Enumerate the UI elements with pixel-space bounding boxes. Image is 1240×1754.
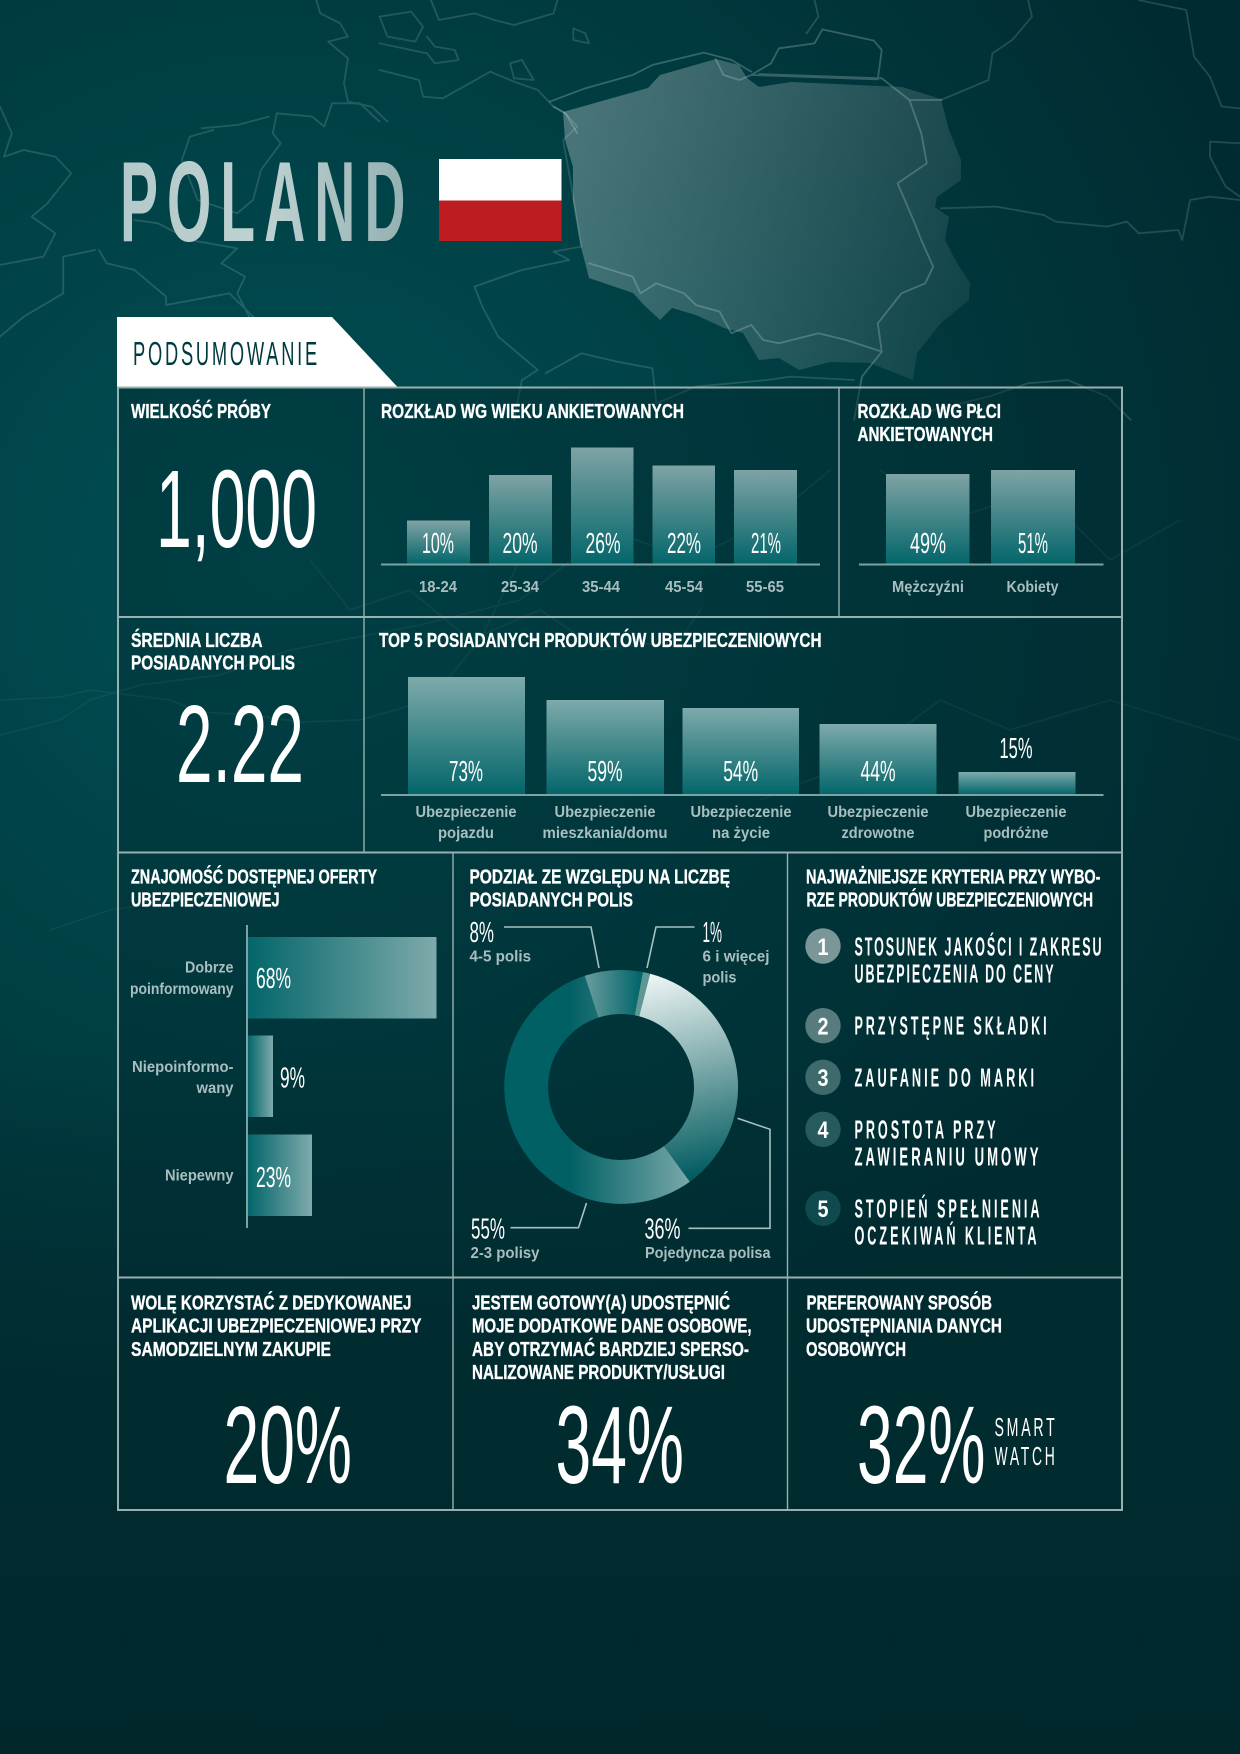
criterion 5 [805,1191,1042,1250]
bar chart: products: Ubezpieczenie [690,804,792,821]
bar chart: age: 20% [502,528,538,560]
callout: 55%: 55% [471,1214,505,1246]
donut chart [504,970,738,1204]
panel: awareness of offer [130,864,436,1228]
heading: TOP 5 POSIADANYCH PRODUKTÓW UBEZPIECZENIOWYCH [379,628,822,652]
criterion 4: ZAWIERANIU UMOWY [854,1141,1042,1171]
panel: top 5 insurance products [379,628,1104,842]
value caption: WATCH [994,1443,1058,1471]
bar chart: age: 21% [751,528,781,560]
bar chart: products: na życie [712,825,770,842]
icon: Polish flag [439,159,562,241]
panel: average number of policies [131,628,304,806]
panel: dedicated app [131,1290,422,1507]
map of Europe outlines [0,0,1240,420]
bar chart: products: Ubezpieczenie [828,804,929,821]
criterion 1 [805,928,1104,988]
heading: ANKIETOWANYCH [858,423,993,446]
bar chart: awareness: Niepoinformo- [132,1059,234,1076]
heading: POSIADANYCH POLIS [131,652,295,674]
heading: JESTEM GOTOWY(A) UDOSTĘPNIĆ [472,1290,730,1314]
bar chart: age: 25-34 [501,579,539,596]
bar chart: awareness: 9% [280,1062,305,1094]
criterion 4 [805,1112,1042,1171]
bar chart: gender [859,470,1104,596]
heading [858,400,1001,446]
bar chart: products: Ubezpieczenie [966,804,1067,821]
bar chart: age: 45-54 [665,579,703,596]
bar chart: awareness [130,925,436,1228]
value caption: SMART [994,1414,1058,1442]
bar chart: products: zdrowotne [842,825,915,842]
bar chart: products: 15% [1000,733,1032,765]
callout: 1%: polis [702,970,737,986]
bar chart: age: 35-44 [582,579,620,596]
section tab: podsumowanie [117,317,398,388]
callout: 1% [647,917,770,986]
shape of Poland [550,29,970,420]
panel: key selection criteria: STOPIEŃ SPEŁNIENIA [854,1193,1042,1223]
heading: OSOBOWYCH [806,1338,906,1361]
faint map lines under panels [0,470,1240,930]
heading: SAMODZIELNYM ZAKUPIE [131,1338,331,1361]
value: 20% [224,1384,352,1507]
callout: 55%: 2-3 polisy [470,1245,540,1262]
panel: key selection criteria: OCZEKIWAŃ KLIENTA [854,1220,1040,1250]
panel: age distribution [381,400,820,596]
bar chart: awareness: poinformowany [130,981,234,998]
panel: preferred data sharing method [806,1290,1058,1507]
heading: ROZKŁAD WG WIEKU ANKIETOWANYCH [381,400,684,423]
heading: WOLĘ KORZYSTAĆ Z DEDYKOWANEJ [131,1290,412,1314]
heading: ABY OTRZYMAĆ BARDZIEJ SPERSO- [472,1337,749,1361]
bar chart: gender: 49% [910,528,946,560]
heading [806,1290,1002,1361]
bar chart: products: 59% [588,756,622,788]
bar chart: gender: 51% [1018,528,1048,560]
heading: PODZIAŁ ZE WZGLĘDU NA LICZBĘ [470,866,730,888]
callout: 1%: 6 i więcej [702,948,770,966]
criterion 1: 1 [818,934,828,961]
heading: ŚREDNIA LICZBA [131,628,263,652]
heading: MOJE DODATKOWE DANE OSOBOWE, [472,1315,752,1338]
callout: 1%: 1% [702,917,722,949]
bar chart: products: podróżne [984,825,1049,842]
bar chart: gender: Kobiety [1006,579,1059,596]
heading: POSIADANYCH POLIS [470,888,633,912]
heading [470,866,730,912]
value: 2.22 [176,683,304,806]
bar chart: awareness: Dobrze [185,960,234,976]
bar chart: awareness: Niepewny [165,1168,234,1184]
bar chart: age: 26% [586,528,620,560]
bar chart: products: 73% [449,756,483,788]
callout: 8%: 8% [470,917,494,949]
criterion 4: PROSTOTA PRZY [854,1115,998,1145]
callout: 8%: 4-5 polis [470,948,531,966]
callout: 36%: Pojedyncza polisa [645,1245,771,1262]
bar chart: age: 18-24 [419,579,457,596]
callout: 36%: 36% [644,1214,680,1246]
heading [472,1290,752,1384]
criterion 3: 3 [818,1065,828,1092]
bar chart: products: 54% [723,756,758,788]
bar chart: awareness: wany [196,1080,234,1097]
panel: sample size [131,399,317,571]
bar chart: age: 10% [422,528,454,560]
bar chart: products: Ubezpieczenie [554,804,656,821]
bar chart: products: Ubezpieczenie [416,804,517,821]
heading: NALIZOWANE PRODUKTY/USŁUGI [472,1361,725,1384]
heading: WIELKOŚĆ PRÓBY [131,399,271,423]
value: 1,000 [156,448,317,571]
heading: UDOSTĘPNIANIA DANYCH [806,1315,1002,1338]
grid lines [118,387,1122,1510]
callout: 55% [470,1203,586,1262]
bar chart: gender: Mężczyźni [892,579,964,596]
heading: NAJWAŻNIEJSZE KRYTERIA PRZY WYBO- [806,866,1100,888]
panel: key selection criteria: ZAUFANIE DO MARKI [854,1063,1037,1093]
heading: ZNAJOMOŚĆ DOSTĘPNEJ OFERTY [131,864,377,888]
value caption [994,1414,1058,1471]
heading [131,628,295,674]
heading: UBEZPIECZENIOWEJ [131,888,280,912]
bar chart: products: 44% [860,756,896,788]
value: 34% [556,1384,684,1507]
heading [806,866,1100,912]
bar chart: age: 22% [667,528,701,560]
panel: gender distribution [858,400,1104,596]
callout: 36% [644,1118,771,1262]
panel: key selection criteria [805,866,1104,1250]
bar chart: products: mieszkania/domu [542,825,668,842]
criterion 2: 2 [818,1013,828,1040]
heading: RZE PRODUKTÓW UBEZPIECZENIOWYCH [806,888,1093,912]
panel backdrop [118,387,1122,1510]
section tab: podsumowanie: PODSUMOWANIE [133,335,320,372]
bar chart: products: pojazdu [438,825,494,842]
criterion 4: 4 [818,1117,829,1144]
bar chart: age: 55-65 [746,579,784,596]
heading [131,864,377,912]
value: 32% [857,1384,986,1507]
criterion 5: 5 [818,1196,828,1223]
bar chart: awareness: 68% [256,963,291,995]
criterion 3 [805,1060,1037,1095]
panel: sharing personal data [472,1290,752,1507]
text: POLAND [120,139,414,266]
heading: APLIKACJI UBEZPIECZENIOWEJ PRZY [131,1315,422,1338]
callout: 8% [470,917,599,968]
bar chart: awareness: 23% [256,1162,291,1194]
heading: ROZKŁAD WG PŁCI [858,400,1001,423]
heading: PREFEROWANY SPOSÓB [806,1290,992,1314]
panel: split by number of policies [470,866,771,1262]
bar chart: products [381,677,1104,842]
heading [131,1290,422,1361]
criterion 2 [805,1008,1050,1043]
bar chart: age [381,448,820,596]
